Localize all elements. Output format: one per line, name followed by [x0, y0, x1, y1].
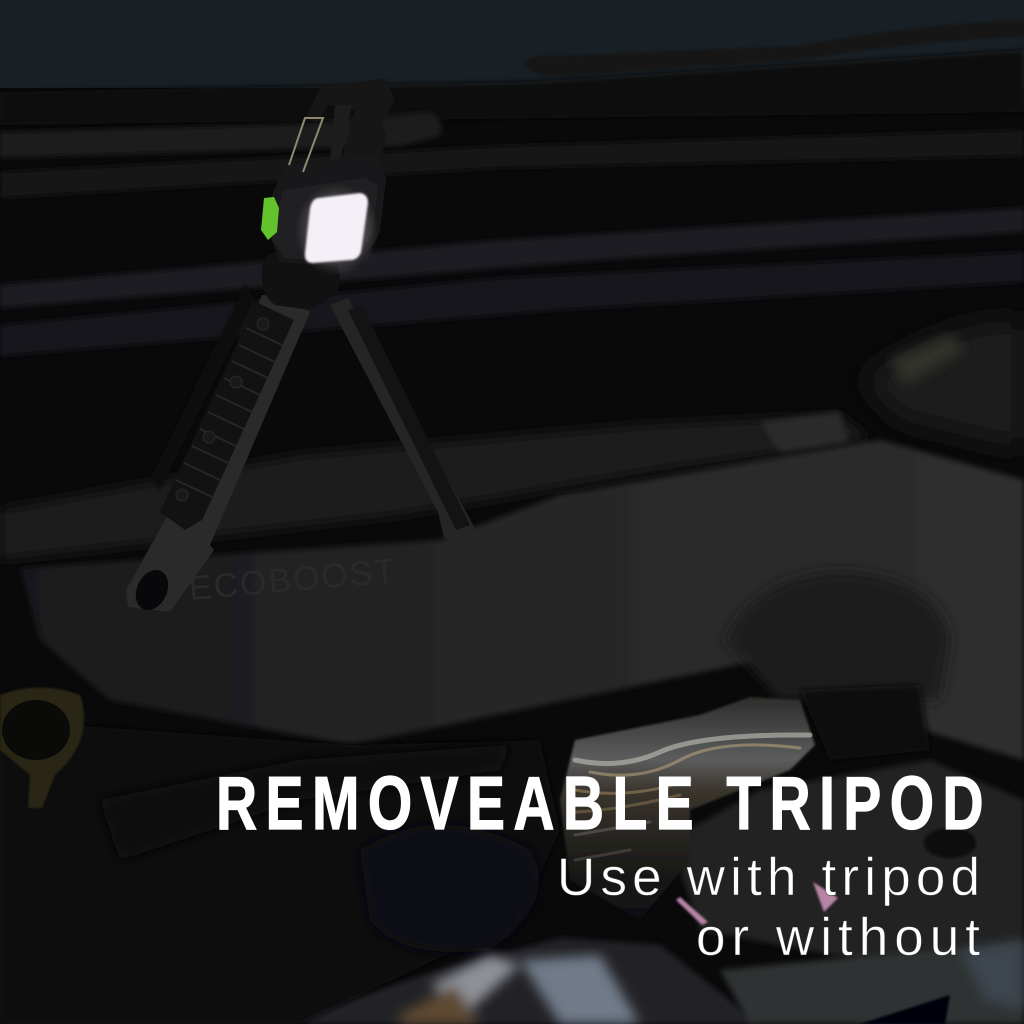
cover circular recess — [725, 572, 950, 700]
engine background hose — [0, 415, 870, 560]
tripod rear leg — [150, 285, 255, 490]
cover embossed logo: ECOBOOST — [187, 552, 399, 608]
subheading line 2: or without — [696, 908, 980, 967]
light glow — [295, 184, 379, 276]
heading: REMOVEABLE TRIPOD — [216, 763, 984, 846]
carabiner frame — [306, 78, 395, 188]
LED panel — [305, 193, 368, 263]
green button — [261, 197, 279, 240]
engine cover — [20, 440, 1024, 760]
flashlight with carabiner — [261, 78, 395, 310]
carabiner wire — [289, 118, 323, 172]
lower engine parts — [0, 685, 1024, 1024]
heat shield — [560, 697, 815, 920]
subheading line 1: Use with tripod — [557, 848, 980, 907]
foil pipe — [300, 938, 760, 1024]
tripod right leg — [330, 298, 476, 541]
tripod main leg — [126, 295, 310, 615]
